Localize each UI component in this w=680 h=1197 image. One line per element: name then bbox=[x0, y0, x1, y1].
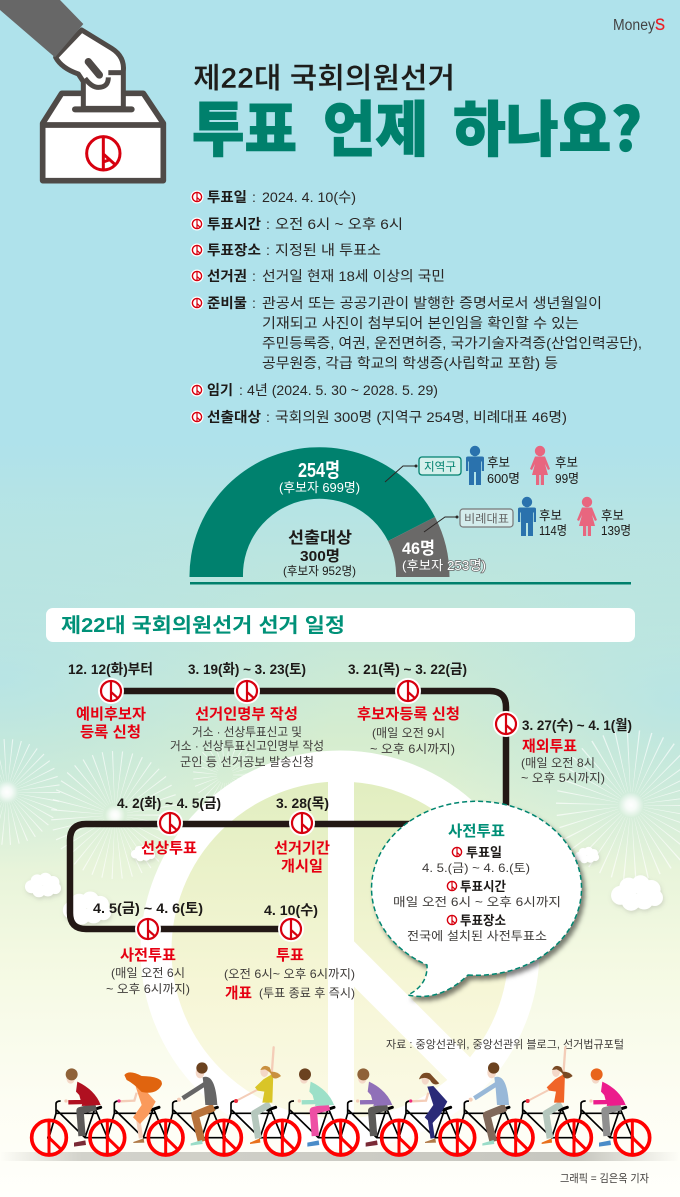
semicircle chart: seats: 선출대상 bbox=[288, 529, 352, 547]
timeline: 투표 개표: (투표 종료 후 즉시) bbox=[259, 986, 355, 1000]
timeline: 선거기간 개시일: 개시일 bbox=[281, 858, 323, 875]
source note: 자료 : 중앙선관위, 중앙선관위 블로그, 선거법규포털 bbox=[386, 1038, 624, 1051]
timeline: 선거인명부 bbox=[170, 661, 324, 769]
candidates: district: 후보 bbox=[487, 455, 510, 470]
timeline: 선거인명부: 군인 등 선거공보 발송신청 bbox=[180, 755, 314, 769]
callout: 지역구 bbox=[385, 457, 461, 482]
clouds bbox=[25, 845, 663, 924]
schedule heading bbox=[46, 608, 635, 642]
callout: 비례대표: 비례대표 bbox=[464, 512, 509, 526]
rider 5 bbox=[280, 1068, 343, 1147]
timeline: 후보자등록: (매일 오전 9시 bbox=[372, 726, 445, 740]
candidates: proportional: 후보 bbox=[539, 508, 562, 523]
timeline: 후보자등록 bbox=[348, 661, 467, 756]
timeline: 선거인명부: 3. 19(화) ~ 3. 23(토) bbox=[188, 661, 306, 677]
rider 9 bbox=[514, 1047, 576, 1144]
icon: hand dropping ballot into box bbox=[0, 0, 163, 181]
key facts list: : bbox=[266, 242, 270, 258]
callout: 비례대표 bbox=[424, 509, 513, 532]
semicircle chart: seats: (후보자 952명) bbox=[283, 564, 356, 578]
schedule heading: 제22대 국회의원선거 선거 일정 bbox=[61, 614, 345, 637]
candidates: proportional: 114명 bbox=[539, 523, 567, 538]
title: 투표 bbox=[192, 82, 297, 169]
key facts list: : bbox=[266, 409, 270, 425]
cyclists row bbox=[32, 1047, 650, 1155]
key facts list: 투표시간 bbox=[207, 216, 261, 232]
timeline: 선거기간 개시일: 선거기간 bbox=[274, 840, 330, 857]
timeline: 재외투표: 재외투표 bbox=[522, 738, 577, 755]
logo: Money bbox=[613, 17, 655, 34]
semicircle chart: seats: 300명 bbox=[300, 548, 340, 565]
key facts list: : bbox=[252, 268, 256, 284]
candidates: district: 600명 bbox=[487, 471, 520, 486]
key facts list: 투표장소 bbox=[207, 242, 261, 258]
candidates: proportional bbox=[518, 497, 631, 538]
key facts list: 투표일 bbox=[207, 189, 247, 205]
key facts list: : bbox=[266, 216, 270, 232]
timeline: 사전투표: 사전투표 bbox=[120, 947, 176, 964]
timeline: 선거기간 개시일 bbox=[274, 795, 330, 875]
credit: 그래픽 = 김은옥 기자 bbox=[560, 1172, 649, 1185]
key facts list: 임기 bbox=[207, 382, 233, 398]
callout: 지역구: 지역구 bbox=[424, 460, 456, 474]
timeline: 재외투표: ~ 오후 5시까지) bbox=[521, 771, 605, 785]
candidates: district bbox=[466, 446, 579, 486]
title bbox=[192, 62, 642, 169]
rider 8 bbox=[455, 1062, 518, 1146]
key facts list bbox=[190, 189, 642, 425]
timeline: 예비후보자 bbox=[68, 661, 153, 741]
key facts list: 4년 (2024. 5. 30 ~ 2028. 5. 29) bbox=[247, 382, 438, 398]
timeline: 예비후보자: 12. 12(화)부터 bbox=[68, 661, 153, 677]
timeline: 선거기간 개시일: 3. 28(목) bbox=[276, 795, 329, 811]
timeline: 투표 개표: (오전 6시~ 오후 6시까지) bbox=[224, 967, 355, 981]
title: 언제 bbox=[323, 82, 428, 169]
timeline: 투표 개표: 개표 bbox=[225, 985, 252, 1002]
semicircle chart: seats: 46명 bbox=[402, 539, 435, 558]
key facts list: 기재되고 사진이 첨부되어 본인임을 확인할 수 있는 bbox=[262, 315, 579, 331]
timeline: 사전투표 bbox=[93, 900, 203, 996]
timeline: 투표 개표: 4. 10(수) bbox=[264, 902, 318, 918]
title: 제22대 국회의원선거 bbox=[193, 62, 455, 95]
timeline: 사전투표: (매일 오전 6시 bbox=[111, 966, 185, 980]
timeline: 투표 개표 bbox=[224, 902, 355, 1002]
timeline: 후보자등록: 3. 21(목) ~ 3. 22(금) bbox=[348, 661, 467, 677]
key facts list: 준비물 bbox=[207, 295, 247, 311]
key facts list: 주민등록증, 여권, 운전면허증, 국가기술자격증(산업인력공단), bbox=[262, 335, 642, 351]
semicircle chart: seats bbox=[189, 447, 631, 584]
timeline: 재외투표: (매일 오전 8시 bbox=[521, 756, 595, 770]
ground shadow bbox=[0, 1152, 680, 1161]
candidates: proportional: 후보 bbox=[601, 508, 624, 523]
wheels bbox=[32, 1120, 650, 1155]
timeline: 선거인명부: 거소 · 선상투표신고 및 bbox=[192, 725, 302, 739]
candidates: proportional: 139명 bbox=[601, 523, 631, 538]
key facts list: 국회의원 300명 (지역구 254명, 비례대표 46명) bbox=[275, 409, 567, 425]
callout bubble: early voting: 4. 5.(금) ~ 4. 6.(토) bbox=[422, 861, 530, 875]
key facts list: : bbox=[239, 382, 243, 398]
key facts list: 선출대상 bbox=[207, 409, 261, 425]
timeline: 선거인명부: 선거인명부 작성 bbox=[195, 706, 298, 723]
timeline: 선상투표: 선상투표 bbox=[141, 840, 197, 857]
key facts list: 공무원증, 각급 학교의 학생증(사립학교 포함) 등 bbox=[262, 355, 558, 371]
timeline: 선상투표: 4. 2(화) ~ 4. 5(금) bbox=[117, 795, 221, 811]
timeline: 사전투표: 4. 5(금) ~ 4. 6(토) bbox=[93, 900, 203, 916]
callout bubble: early voting: 사전투표 bbox=[448, 823, 505, 840]
rider 4 bbox=[222, 1047, 284, 1144]
key facts list: 선거권 bbox=[207, 268, 247, 284]
rider 10 bbox=[572, 1068, 634, 1147]
callout bubble: early voting: 투표일 bbox=[466, 845, 502, 860]
semicircle chart: seats: 254명 bbox=[298, 459, 340, 482]
key facts list: : bbox=[252, 295, 256, 311]
key facts list: 2024. 4. 10(수) bbox=[262, 189, 356, 205]
timeline: 선거인명부: 거소 · 선상투표신고인명부 작성 bbox=[170, 739, 324, 753]
logo: S bbox=[655, 15, 665, 34]
candidates: district: 99명 bbox=[555, 471, 579, 486]
timeline: 투표 개표: 투표 bbox=[276, 947, 304, 964]
rider 3 bbox=[164, 1062, 226, 1146]
timeline: 후보자등록: 후보자등록 신청 bbox=[357, 706, 460, 723]
rider 6 bbox=[339, 1068, 401, 1147]
callout bubble: early voting: 전국에 설치된 사전투표소 bbox=[407, 929, 547, 943]
candidates: district: 후보 bbox=[555, 455, 578, 470]
callout bubble: early voting: 투표시간 bbox=[460, 879, 506, 894]
timeline: 사전투표: ~ 오후 6시까지) bbox=[106, 982, 190, 996]
key facts list: 지정된 내 투표소 bbox=[275, 242, 381, 258]
callout bubble: early voting: 투표장소 bbox=[460, 913, 506, 928]
timeline: 재외투표 bbox=[493, 711, 632, 785]
callout bubble: early voting: 매일 오전 6시 ~ 오후 6시까지 bbox=[393, 895, 561, 909]
semicircle chart: seats: (후보자 253명) bbox=[402, 558, 486, 573]
sunbursts bbox=[0, 755, 675, 853]
semicircle chart: seats: (후보자 699명) bbox=[279, 480, 360, 495]
timeline: 예비후보자: 예비후보자 bbox=[76, 706, 146, 723]
title: 하나요? bbox=[453, 82, 642, 169]
rider 7 bbox=[397, 1073, 459, 1143]
timeline: 선상투표 bbox=[117, 795, 221, 857]
timeline: 재외투표: 3. 27(수) ~ 4. 1(월) bbox=[522, 717, 632, 733]
timeline: 후보자등록: ~ 오후 6시까지) bbox=[370, 742, 455, 756]
callout bubble: early voting bbox=[372, 801, 582, 996]
timeline path bbox=[70, 691, 506, 929]
key facts list: 관공서 또는 공공기관이 발행한 증명서로서 생년월일이 bbox=[262, 295, 602, 311]
rider 2 bbox=[105, 1072, 168, 1143]
timeline: 예비후보자: 등록 신청 bbox=[80, 724, 141, 741]
background peace symbol bbox=[156, 752, 524, 1147]
key facts list: 오전 6시 ~ 오후 6시 bbox=[275, 216, 403, 232]
rider 1 bbox=[47, 1068, 109, 1147]
key facts list: 선거일 현재 18세 이상의 국민 bbox=[262, 268, 445, 284]
key facts list: : bbox=[252, 189, 256, 205]
